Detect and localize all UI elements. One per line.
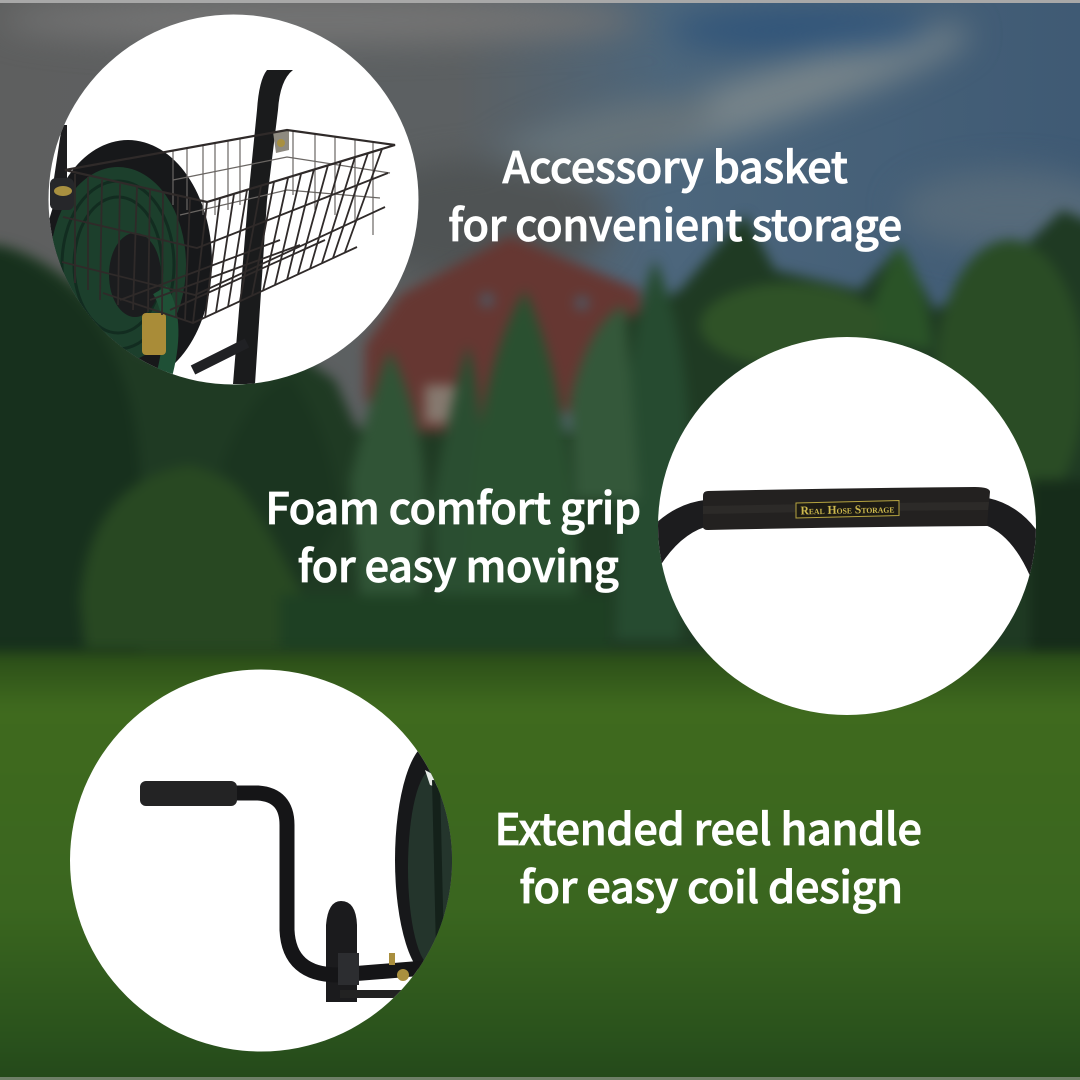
photo circle: foam grip handle <box>658 337 1036 715</box>
caption: accessory basket: Accessory basket <box>502 133 848 196</box>
bracket and bolts <box>338 953 409 998</box>
hose coil <box>50 167 186 363</box>
caption: reel handle <box>494 795 922 916</box>
trees <box>0 210 1080 660</box>
reel wheel <box>44 140 212 384</box>
crank grip <box>140 781 237 806</box>
frame upright <box>233 70 293 384</box>
reel side view <box>395 751 452 969</box>
left post and mount <box>50 125 67 205</box>
wire basket front <box>62 130 395 323</box>
caption: reel handle: Extended reel handle <box>494 795 922 858</box>
handle tube left <box>658 500 704 564</box>
photo circle: extended reel handle <box>70 670 452 1052</box>
caption: accessory basket: for convenient storage <box>448 191 902 254</box>
caption: foam grip: Foam comfort grip <box>265 474 641 537</box>
brand label: Real Hose Storage <box>800 502 895 517</box>
house <box>365 236 640 435</box>
caption: foam grip <box>265 474 641 595</box>
wire basket back <box>173 131 390 235</box>
caption: foam grip: for easy moving <box>298 532 618 595</box>
brass fitting <box>142 313 166 355</box>
handle tube right <box>987 498 1036 575</box>
crank arm <box>232 793 425 975</box>
small wheel <box>326 901 357 1002</box>
caption: reel handle: for easy coil design <box>519 853 903 916</box>
caption: accessory basket <box>448 133 902 254</box>
photo circle: accessory basket <box>48 14 418 384</box>
foam grip <box>703 487 990 530</box>
